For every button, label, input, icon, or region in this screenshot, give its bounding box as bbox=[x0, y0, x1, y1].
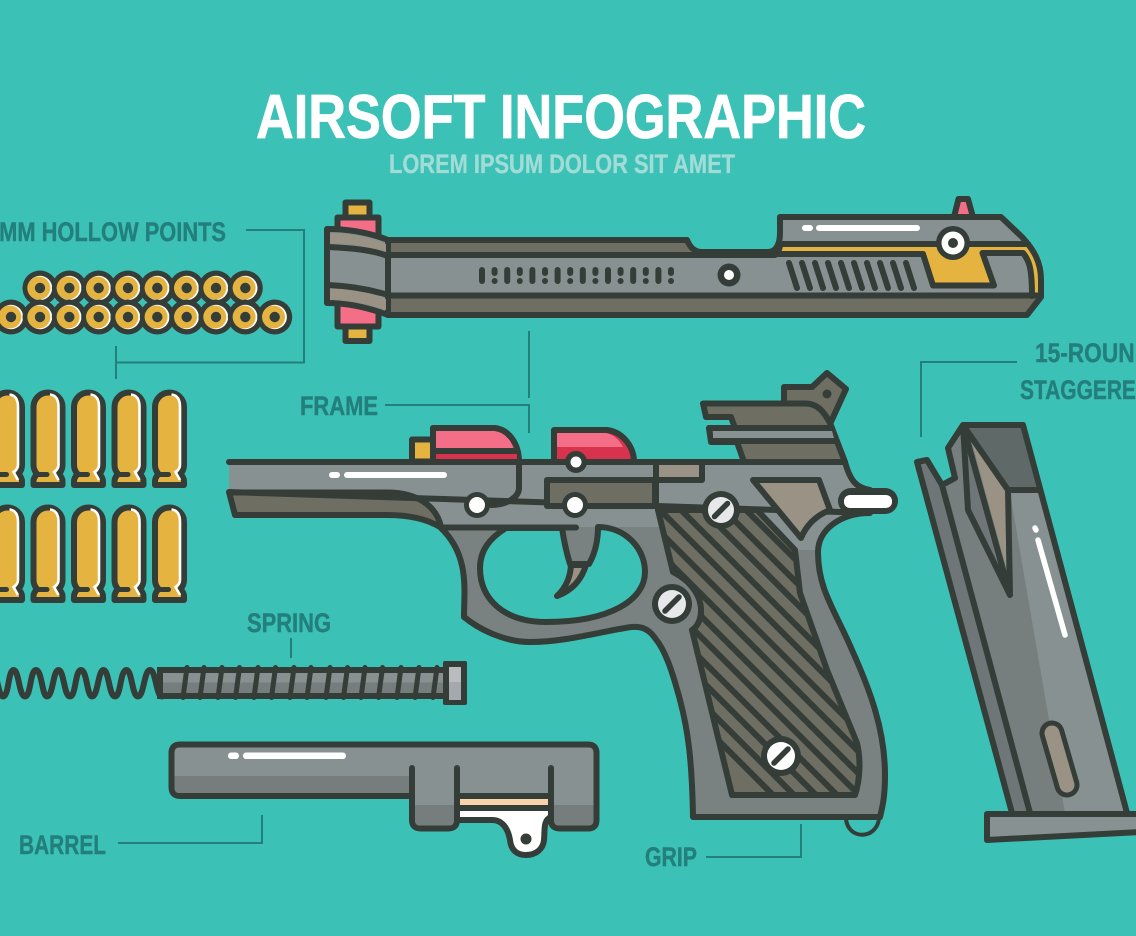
frame bbox=[226, 370, 898, 837]
tan triangle plate bbox=[753, 480, 830, 538]
magazine light face bbox=[1010, 490, 1127, 813]
barrel highlight bbox=[228, 752, 346, 759]
slide body bbox=[388, 217, 1041, 315]
label: frame: FRAME bbox=[300, 391, 378, 421]
rod shaft bbox=[160, 670, 446, 696]
magazine top dark face bbox=[963, 425, 1037, 490]
takedown block bbox=[547, 480, 655, 506]
rounds viewed from the back bbox=[0, 270, 292, 334]
trigger tip bbox=[557, 565, 586, 596]
rear sight lines bbox=[709, 428, 836, 441]
slide bbox=[327, 199, 1041, 341]
barrel bbox=[172, 744, 596, 855]
rod light band bbox=[163, 673, 444, 682]
slide muzzle block bbox=[327, 229, 388, 315]
grip stripes bbox=[662, 513, 856, 792]
screw lower bbox=[761, 736, 801, 776]
pink lever red band bbox=[434, 451, 517, 460]
slide serrations bbox=[479, 267, 674, 284]
slide lines bbox=[388, 244, 1040, 296]
screw upper bbox=[702, 491, 740, 529]
leader: grip bbox=[706, 824, 801, 857]
dust cover brown bbox=[232, 494, 441, 527]
standing rounds bbox=[0, 392, 184, 600]
rear nub bbox=[838, 488, 898, 514]
slide rear screw bbox=[936, 226, 970, 260]
rod threads bbox=[183, 668, 437, 698]
subtitle: LOREM IPSUM DOLOR SIT AMET bbox=[389, 149, 735, 179]
label: grip: GRIP bbox=[645, 842, 697, 872]
frame pins bbox=[464, 451, 588, 518]
frame rail lines bbox=[231, 462, 576, 528]
barrel lug hole bbox=[520, 834, 532, 844]
pink catch highlight bbox=[557, 433, 623, 447]
slide gold insert bbox=[776, 247, 1040, 297]
magazine slot bbox=[1052, 733, 1067, 785]
barrel peach strip bbox=[457, 799, 551, 808]
leader: 9mm hollow points bbox=[116, 230, 304, 379]
slide outline bbox=[388, 217, 1041, 315]
magazine tan facet bbox=[972, 443, 1006, 567]
slide brown strips bbox=[388, 241, 1040, 314]
barrel shaded lower bbox=[174, 776, 594, 826]
recoil spring coil bbox=[0, 670, 162, 696]
magazine bbox=[917, 425, 1136, 840]
pink slide catch bbox=[554, 430, 634, 462]
barrel cut lines bbox=[412, 768, 551, 820]
label: barrel: BARREL bbox=[19, 830, 106, 860]
frame outline bbox=[229, 462, 885, 817]
trigger guard opening bbox=[480, 527, 645, 622]
label: spring: SPRING bbox=[247, 608, 331, 638]
leader: spring bbox=[290, 638, 292, 658]
barrel white lug bbox=[457, 795, 551, 855]
magazine left strip bbox=[917, 460, 1030, 813]
front sight bbox=[954, 199, 973, 217]
frame body bbox=[229, 462, 885, 817]
slide front cap top bbox=[338, 202, 378, 238]
magazine highlight bbox=[1035, 528, 1065, 635]
grip panel bbox=[658, 510, 859, 795]
frame highlight bbox=[329, 472, 447, 478]
hammer bbox=[784, 373, 846, 424]
guide rod bbox=[160, 661, 467, 705]
slide highlight bbox=[802, 225, 920, 231]
lanyard loop bbox=[846, 819, 879, 835]
leader: 15-round magazine bbox=[921, 362, 1017, 437]
grip panel outline bbox=[658, 510, 859, 795]
leader: barrel bbox=[118, 815, 262, 843]
slide pin bbox=[718, 264, 740, 286]
magazine outline bbox=[917, 425, 1127, 813]
label: 15-round staggered bbox=[1020, 338, 1136, 405]
magazine gray facet bbox=[968, 453, 998, 567]
gold block bbox=[412, 440, 434, 462]
magazine base plate bbox=[987, 814, 1136, 840]
frame light upper bbox=[225, 460, 875, 550]
leader: frame bbox=[385, 331, 529, 433]
pink safety lever bbox=[433, 428, 519, 462]
rear sight gray strip bbox=[713, 431, 834, 438]
barrel body bbox=[172, 744, 596, 828]
rod head bbox=[443, 661, 467, 705]
screw middle bbox=[652, 584, 692, 624]
tan plate bbox=[655, 462, 702, 506]
title: AIRSOFT INFOGRAPHIC bbox=[256, 83, 866, 152]
slide vents bbox=[789, 263, 914, 288]
slide front cap bottom bbox=[338, 303, 378, 341]
magazine body dark bbox=[942, 425, 1127, 813]
rear sight assembly bbox=[703, 404, 845, 462]
